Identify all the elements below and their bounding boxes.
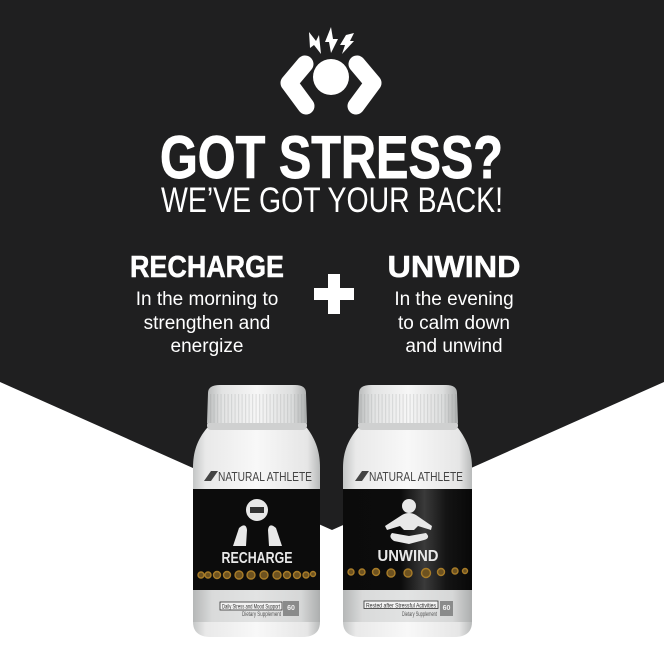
supplement label: Rested after Stressful Activities	[366, 602, 437, 610]
supplement label	[364, 601, 453, 618]
icon: person with battery	[233, 499, 282, 546]
benefit icons row	[348, 568, 468, 578]
benefit icons row	[198, 571, 316, 579]
text block: recharge: strengthen and	[144, 313, 270, 334]
bottle: recharge	[193, 385, 320, 637]
text block: unwind: and unwind	[405, 336, 503, 357]
supplement label: 60	[287, 605, 295, 612]
text block: recharge: In the morning to	[136, 289, 278, 310]
dark chevron background	[0, 0, 664, 530]
title: GOT STRESS?	[160, 124, 503, 191]
brand label: NATURAL ATHLETE	[369, 469, 463, 484]
icon: meditating figure	[385, 499, 432, 544]
supplement label	[220, 601, 299, 618]
product name: RECHARGE	[222, 550, 293, 567]
text block: unwind: to calm down	[398, 313, 510, 334]
supplement label: 60	[443, 605, 450, 612]
icon: stressed head with lightning bolts	[289, 27, 373, 106]
icon: plus sign	[314, 274, 354, 314]
product name: UNWIND	[378, 548, 438, 565]
text block: unwind: In the evening	[394, 289, 514, 310]
text block: recharge: RECHARGE	[130, 249, 284, 284]
text block: recharge: energize	[171, 336, 243, 357]
subtitle: WE’VE GOT YOUR BACK!	[161, 181, 503, 220]
text block: recharge	[130, 249, 284, 357]
supplement label: Dietary Supplement	[242, 611, 281, 618]
bottle: unwind	[343, 385, 472, 637]
supplement label: Daily Stress and Mood Support	[222, 604, 280, 610]
brand label: NATURAL ATHLETE	[218, 469, 312, 484]
supplement label: Dietary Supplement	[402, 611, 437, 618]
text block: unwind	[388, 249, 520, 357]
text block: unwind: UNWIND	[388, 249, 520, 284]
